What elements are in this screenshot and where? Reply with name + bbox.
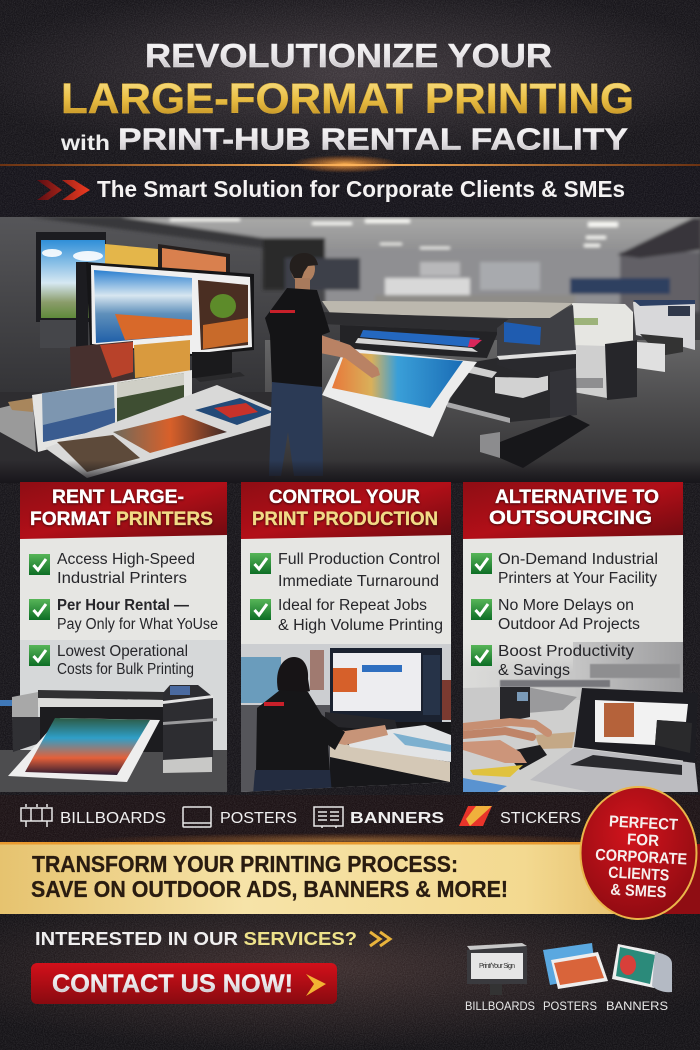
product icons: POSTERS (543, 999, 597, 1013)
title: with (60, 132, 110, 155)
panel 2 header (241, 482, 451, 539)
panel 2 header: CONTROL YOUR (269, 487, 420, 508)
panel 2 bullets (250, 551, 443, 634)
product icons (465, 943, 672, 1013)
panel 1 header: FORMAT PRINTERS (30, 509, 213, 530)
panel 3 bullets: No More Delays on (498, 597, 634, 614)
category row: BANNERS (350, 810, 444, 827)
panel 2 header: PRINT PRODUCTION (252, 509, 438, 530)
panel 3 header: ALTERNATIVE TO (495, 487, 659, 508)
panel 1 bullets: Access High-Speed (57, 551, 195, 568)
gold banner (0, 833, 700, 914)
panel 3 bullets: Printers at Your Facility (498, 570, 657, 587)
icon: banner roll (612, 944, 672, 992)
panel 2 bullets: & High Volume Printing (278, 617, 443, 634)
button: contact us now (31, 963, 337, 1004)
man (265, 253, 380, 476)
button: contact us now: CONTACT US NOW! (52, 970, 293, 998)
badge: perfect for corporate clients and SMEs: & SMES (610, 882, 667, 902)
hero photo: print shop (0, 217, 700, 484)
stacked prints (0, 340, 273, 478)
bottom fade (0, 460, 700, 484)
check 1 (29, 554, 50, 575)
icon: red chevrons (37, 180, 90, 200)
badge: perfect for corporate clients and SMEs: PERFECT (609, 813, 679, 834)
panel 1 bullets (29, 551, 218, 678)
product icons: BILLBOARDS (465, 999, 535, 1013)
printer top cover (322, 301, 573, 318)
panel 2 photo (241, 644, 451, 797)
title: REVOLUTIONIZE YOUR (145, 37, 552, 74)
background printers (572, 300, 695, 400)
printer lower body (447, 358, 550, 422)
panel 3 bullets: Outdoor Ad Projects (498, 616, 640, 633)
icon: billboard product: Print/Your Sign (479, 963, 515, 970)
panel 1 bullets: Lowest Operational (57, 643, 188, 660)
store background (blurred) (30, 217, 700, 312)
panel 3 bullets: & Savings (498, 662, 570, 679)
panel 1 floor (0, 750, 227, 795)
panel 3 bullets (471, 551, 658, 679)
large format printer (322, 301, 590, 468)
icon: billboard (21, 804, 52, 827)
badge: perfect for corporate clients and SMEs (580, 787, 696, 919)
icon: banner (314, 807, 343, 828)
panel 3 bullets: Boost Productivity (498, 643, 634, 660)
panel 3 header (463, 482, 683, 539)
category row: STICKERS (500, 810, 581, 827)
gold banner: SAVE ON OUTDOOR ADS, BANNERS & MORE! (31, 876, 508, 902)
category row: BILLBOARDS (60, 810, 166, 827)
category row: POSTERS (220, 810, 297, 827)
gold banner: TRANSFORM YOUR PRINTING PROCESS: (32, 851, 458, 877)
printer tower (497, 305, 576, 356)
icon: button arrow (306, 974, 326, 996)
icon: sticker (459, 806, 492, 826)
panel 1 header: RENT LARGE- (52, 487, 184, 508)
printed sheet (322, 348, 477, 437)
panel 1 bullets: Industrial Printers (57, 570, 187, 587)
panel 1 bullets: Per Hour Rental — (57, 597, 189, 614)
panel 3 photo (463, 642, 698, 792)
product icons: BANNERS (606, 999, 668, 1013)
icon: posters (543, 943, 608, 989)
glowing divider (0, 155, 700, 173)
panel 2 bullets: Immediate Turnaround (278, 573, 439, 590)
icon: billboard product (467, 943, 527, 995)
badge: perfect for corporate clients and SMEs: FOR (627, 831, 660, 850)
panel 2 bullets: Full Production Control (278, 551, 440, 568)
title: PRINT-HUB RENTAL FACILITY (118, 122, 628, 156)
call to action prompt: INTERESTED IN OUR SERVICES? (35, 928, 357, 949)
icon: double chevron (370, 932, 390, 946)
panel: control your print production (241, 482, 451, 797)
panel 1 printer (0, 685, 217, 782)
category row (21, 804, 581, 828)
panel 1 wall (20, 640, 227, 752)
poster wall (36, 232, 254, 382)
panel: alternative to outsourcing (463, 482, 698, 792)
panel 1 bullets: Pay Only for What YoUse (57, 616, 218, 633)
panel 1 header (20, 482, 227, 539)
icon: poster screen (183, 807, 211, 827)
title (60, 37, 634, 156)
badge: perfect for corporate clients and SMEs: CLIENTS (608, 864, 670, 885)
panel 3 header: OUTSOURCING (489, 508, 652, 529)
badge: perfect for corporate clients and SMEs: CORPORATE (595, 847, 688, 869)
panel 2 bullets: Ideal for Repeat Jobs (278, 597, 427, 614)
panel 1 bullets: Costs for Bulk Printing (57, 661, 194, 678)
title: LARGE-FORMAT PRINTING (61, 75, 634, 123)
panel 3 bullets: On-Demand Industrial (498, 551, 658, 568)
panel: rent large-format printers (0, 482, 227, 795)
printer footrest (480, 432, 500, 458)
subtitle with arrow: The Smart Solution for Corporate Clients & SMEs (97, 176, 625, 202)
